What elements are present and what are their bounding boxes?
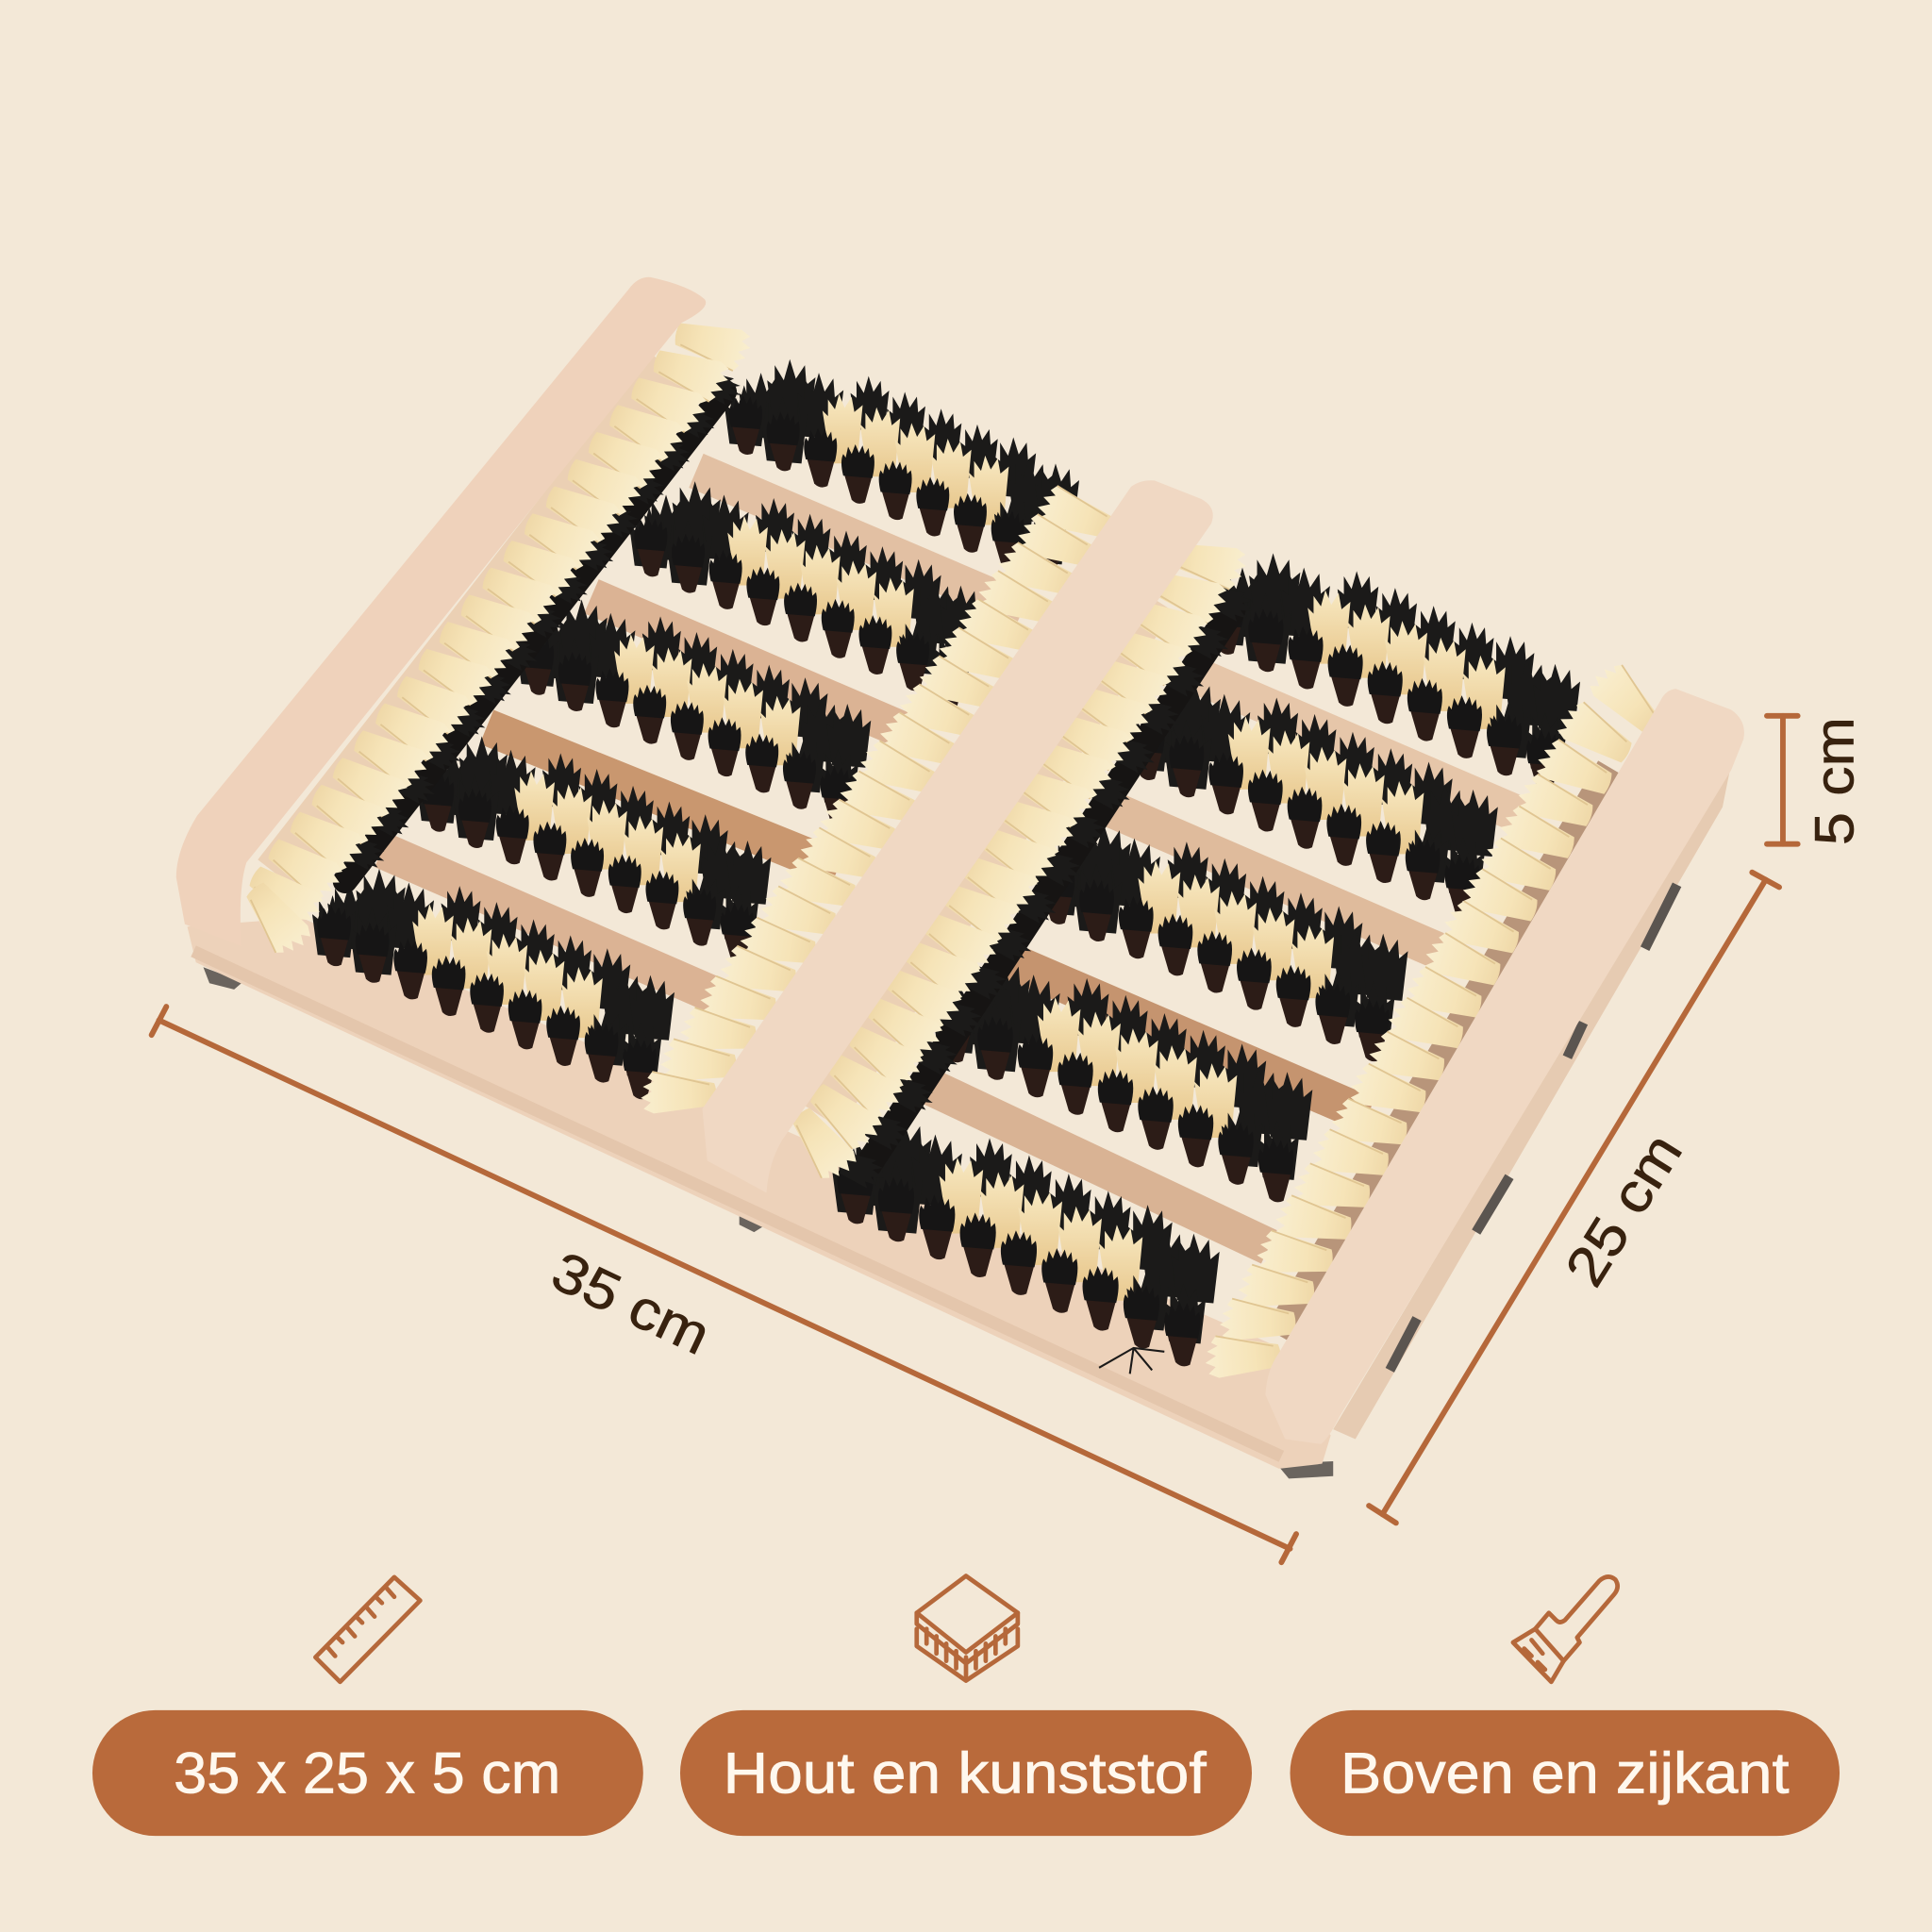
base plate [188,918,1331,1469]
pill: material [680,1710,1252,1836]
pill: material: Hout en kunststof [724,1740,1208,1806]
pill: brush sides [1291,1710,1840,1836]
dimension line: 25 cm [1369,873,1779,1523]
right wooden rail [1265,689,1744,1444]
dimension line: 5 cm [1767,716,1798,844]
middle wooden rail [702,480,1213,1192]
icon: paint brush [1513,1576,1618,1682]
dimension label: 35 cm: 35 cm [542,1241,719,1367]
pill: dimensions: 35 x 25 x 5 cm [174,1740,560,1806]
base plate front edge [193,951,1281,1457]
shaded strip behind right rail bristles [1281,770,1614,1337]
icon: brush block [917,1576,1018,1681]
pill: brush sides: Boven en zijkant [1341,1740,1789,1806]
rubber feet [204,967,1333,1478]
bristle rows left section [312,359,1079,1099]
dimension label: 5 cm: 5 cm [1804,717,1865,845]
right side panel with feet [1333,764,1731,1440]
slats right section [912,677,1522,1247]
dark bristle band along left rail [341,368,745,881]
cream bristles on middle rail, left side [640,482,1118,1114]
dimension line: 35 cm [152,1007,1296,1562]
bristle rows right section [832,553,1580,1366]
dark bristle band along middle rail [838,582,1258,1192]
cream bristles on middle rail, right side [781,537,1249,1188]
product: wooden shoe brush mat [176,277,1744,1478]
slats left section [382,471,1023,1001]
wood strips under rail bristles [277,370,1152,1115]
pill: dimensions [92,1710,643,1836]
cream bristles on right rail [1203,657,1669,1379]
icon: ruler [315,1577,420,1682]
left wooden rail [176,277,706,946]
small stray bristles [1099,1348,1164,1374]
cream bristles on left rail [235,317,754,962]
dimension label: 25 cm: 25 cm [1554,1124,1694,1297]
